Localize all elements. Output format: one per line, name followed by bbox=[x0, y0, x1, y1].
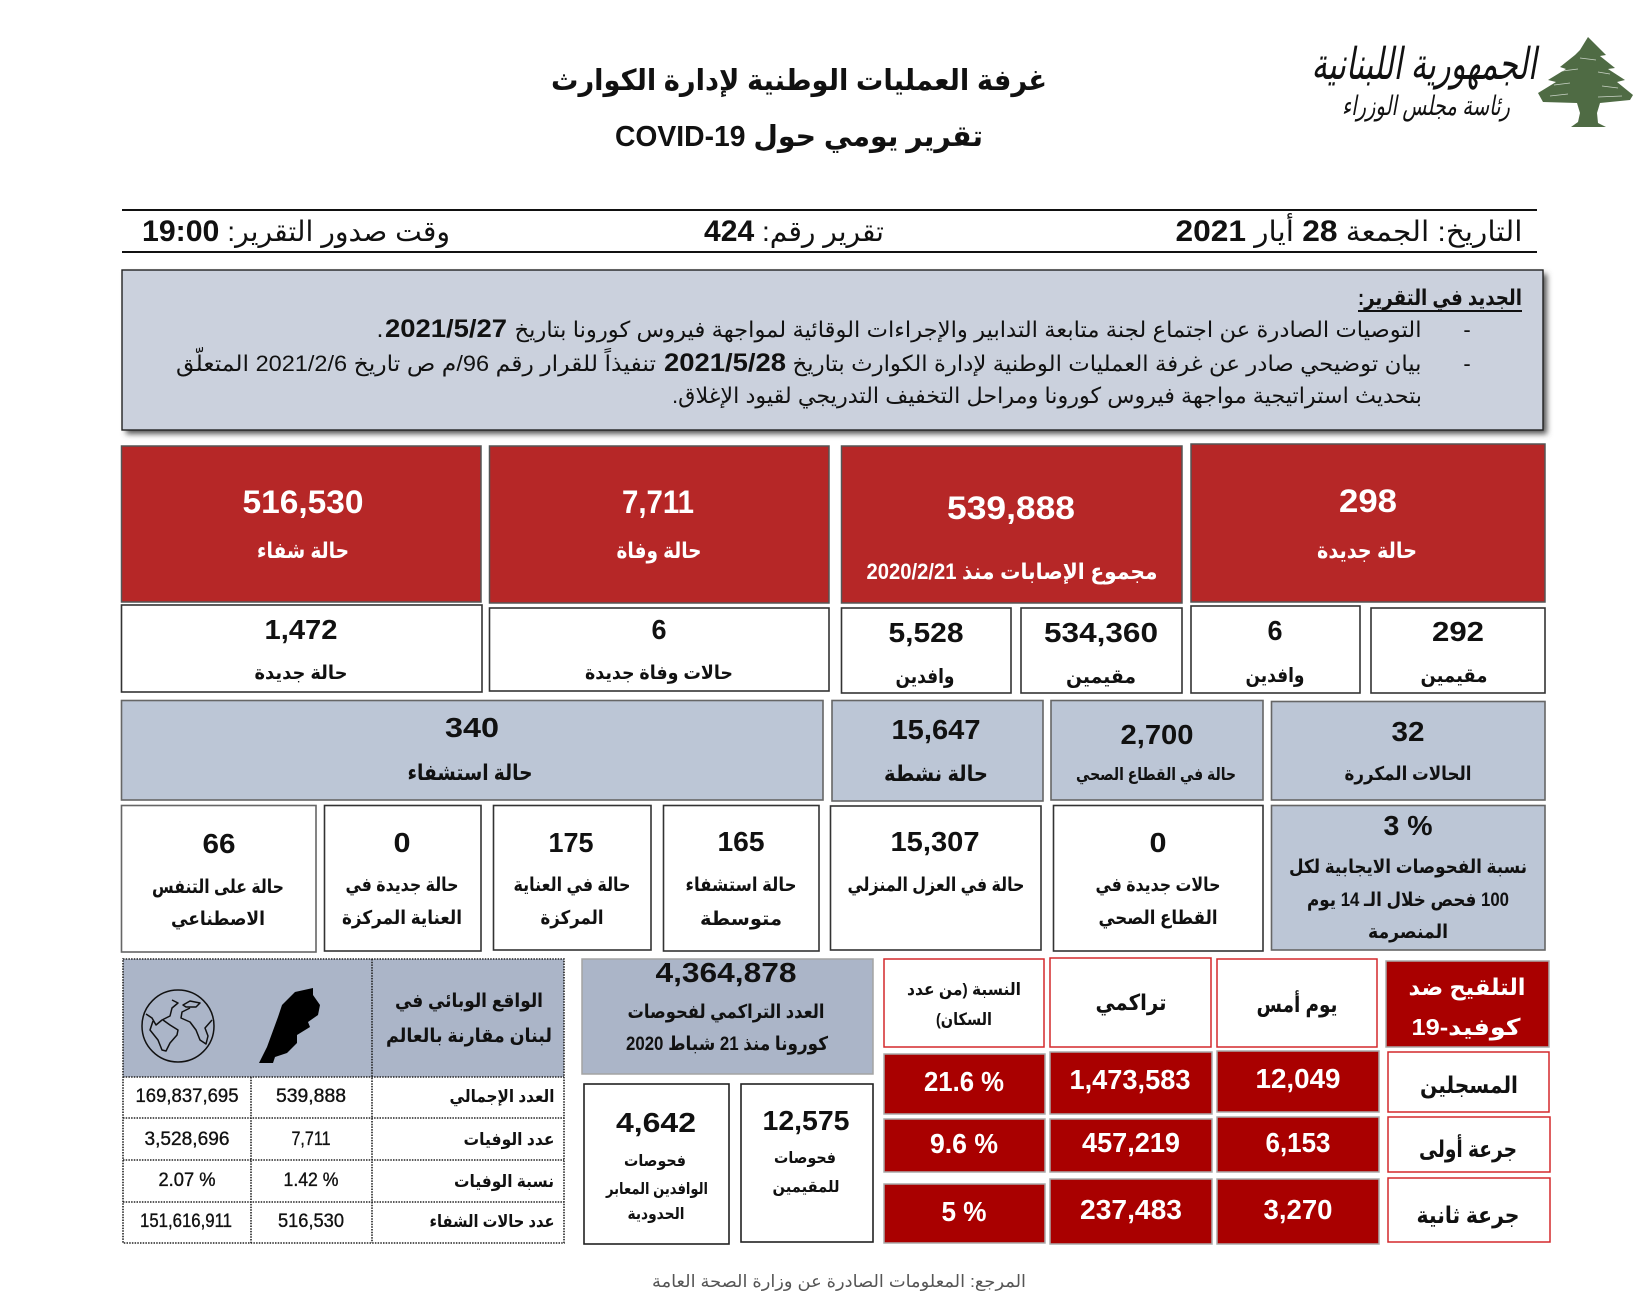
label: العدد التراكمي لفحوصات bbox=[628, 1002, 824, 1023]
header: percentage: النسبة (من عدد bbox=[907, 980, 1021, 1000]
row: death rate: 1.42 % bbox=[284, 1170, 339, 1191]
panel: new health sector bbox=[1054, 806, 1263, 951]
row label: registered bbox=[1388, 1052, 1549, 1112]
panel: new deaths bbox=[490, 608, 829, 691]
cell: first dose cumulative: 457,219 bbox=[1082, 1127, 1180, 1158]
label: حالة نشطة bbox=[884, 761, 988, 786]
label: فحوصات bbox=[624, 1153, 686, 1170]
bullet 2 text end: تنفيذاً للقرار رقم 96/م ص تاريخ 2021/2/6 المتعلّق bbox=[176, 347, 656, 377]
report number: تقرير رقم: 424 bbox=[704, 215, 884, 248]
header: vaccination: التلقيح ضد bbox=[1408, 974, 1526, 1001]
cell: second dose yesterday: 3,270 bbox=[1264, 1194, 1332, 1225]
label: مقيمين bbox=[1066, 666, 1136, 688]
bullet 1 date: 2021/5/27 bbox=[385, 315, 507, 343]
cell: second dose percentage: 5 % bbox=[942, 1196, 987, 1227]
label: الحالات المكررة bbox=[1344, 764, 1472, 785]
row: deaths: عدد الوفيات bbox=[464, 1130, 554, 1150]
header: yesterday bbox=[1217, 959, 1377, 1047]
bullet 2 date: 2021/5/28 bbox=[664, 349, 786, 377]
footer source: المرجع: المعلومات الصادرة عن وزارة الصحة العامة bbox=[652, 1272, 1026, 1292]
value: 340 bbox=[445, 712, 499, 743]
bullet 1 dash: - bbox=[1463, 317, 1471, 342]
label line 2: متوسطة bbox=[700, 909, 782, 930]
panel: health sector cases bbox=[1051, 700, 1263, 800]
value: 32 bbox=[1392, 716, 1424, 747]
panel: total cases bbox=[842, 446, 1182, 603]
cell: first dose percentage: 9.6 % bbox=[930, 1128, 998, 1159]
panel: hospitalised bbox=[122, 700, 823, 800]
label: حالة استشفاء bbox=[408, 760, 532, 785]
report time: وقت صدور التقرير: 19:00 bbox=[142, 215, 450, 248]
header: percentage bbox=[884, 959, 1044, 1047]
icon: globe bbox=[142, 990, 214, 1062]
vaccination table bbox=[884, 958, 1550, 1244]
subtitle: تقرير يومي حول COVID-19 bbox=[615, 121, 983, 153]
cell: registered yesterday bbox=[1217, 1051, 1379, 1112]
cell: second dose yesterday bbox=[1217, 1179, 1379, 1244]
cell: registered percentage: 21.6 % bbox=[924, 1066, 1004, 1097]
label: حالة جديدة bbox=[254, 663, 348, 684]
label line 2: كورونا منذ 21 شباط 2020 bbox=[626, 1034, 829, 1055]
cell: first dose yesterday: 6,153 bbox=[1266, 1127, 1330, 1158]
row label: second dose: جرعة ثانية bbox=[1416, 1202, 1520, 1229]
panel: active cases bbox=[832, 700, 1043, 801]
label: حالة جديدة في bbox=[346, 875, 458, 896]
value: 15,307 bbox=[890, 826, 980, 857]
label: نسبة الفحوصات الايجابية لكل bbox=[1289, 857, 1527, 878]
row: recoveries: عدد حالات الشفاء bbox=[430, 1212, 554, 1231]
header: cumulative: تراكمي bbox=[1096, 990, 1166, 1016]
row: deaths: 3,528,696 bbox=[144, 1129, 230, 1150]
label: حالة وفاة bbox=[616, 538, 702, 564]
panel: new cases bbox=[1191, 444, 1545, 602]
panel: new ICU bbox=[324, 806, 481, 951]
label line 2: المركزة bbox=[540, 908, 604, 929]
bullet 2 dash: - bbox=[1463, 351, 1471, 376]
bullet 2 text start: بيان توضيحي صادر عن غرفة العمليات الوطنية لإدارة الكوارث بتاريخ bbox=[792, 351, 1422, 377]
value: 66 bbox=[202, 828, 236, 859]
label: فحوصات bbox=[774, 1150, 836, 1167]
value: 175 bbox=[548, 827, 594, 858]
label line 2: العناية المركزة bbox=[342, 908, 462, 929]
value: 165 bbox=[718, 826, 764, 857]
value: 298 bbox=[1339, 483, 1397, 519]
header: percentage: السكان) bbox=[936, 1010, 992, 1029]
panel: new in the report bbox=[122, 270, 1547, 434]
row: total bbox=[136, 1086, 554, 1107]
cell: first dose yesterday bbox=[1217, 1117, 1379, 1172]
label: حالة في العزل المنزلي bbox=[848, 875, 1024, 896]
row label: second dose bbox=[1388, 1178, 1550, 1242]
value: 5,528 bbox=[888, 617, 964, 648]
panel: deaths bbox=[490, 446, 829, 603]
value: 6 bbox=[1268, 615, 1282, 646]
row: death rate: نسبة الوفيات bbox=[454, 1172, 554, 1192]
label: مجموع الإصابات منذ 2020/2/21 bbox=[866, 559, 1158, 585]
value: 15,647 bbox=[892, 714, 980, 745]
cell: registered percentage bbox=[884, 1054, 1045, 1114]
report date: التاريخ: الجمعة 28 أيار 2021 bbox=[1176, 212, 1522, 248]
label: وافدين bbox=[1246, 665, 1304, 687]
bullet 2 continuation: بتحديث استراتيجية مواجهة فيروس كورونا ومراحل التخفيف التدريجي لقيود الإغلاق. bbox=[672, 383, 1422, 409]
value: 0 bbox=[394, 827, 410, 858]
row: total: 539,888 bbox=[276, 1086, 346, 1107]
cell: registered cumulative: 1,473,583 bbox=[1070, 1064, 1190, 1095]
row: death rate bbox=[158, 1170, 554, 1192]
cell: registered cumulative bbox=[1050, 1052, 1212, 1114]
label: حالات جديدة في bbox=[1096, 875, 1220, 896]
header: cumulative bbox=[1050, 958, 1211, 1047]
cell: second dose cumulative bbox=[1050, 1179, 1212, 1244]
label: وافدين bbox=[896, 666, 954, 688]
panel: ICU bbox=[494, 806, 651, 950]
logo text: Presidency of the Council of Ministers: رئاسة مجلس الوزراء bbox=[1342, 91, 1510, 122]
cell: second dose percentage bbox=[884, 1184, 1045, 1243]
row: total: 169,837,695 bbox=[136, 1086, 238, 1107]
label: حالة على التنفس bbox=[152, 877, 284, 898]
value: 534,360 bbox=[1044, 617, 1158, 648]
icon: cedar tree logo bbox=[1538, 37, 1633, 127]
value: 12,575 bbox=[762, 1105, 850, 1136]
value: 516,530 bbox=[242, 484, 364, 520]
heading: new in report: الجديد في التقرير: bbox=[1358, 285, 1522, 311]
panel: total incoming bbox=[842, 608, 1011, 693]
panel: cumulative tests bbox=[582, 957, 873, 1074]
panel: home isolation bbox=[830, 806, 1041, 950]
row: total: العدد الإجمالي bbox=[450, 1087, 554, 1107]
cell: registered yesterday: 12,049 bbox=[1256, 1063, 1340, 1094]
header: yesterday: يوم أمس bbox=[1256, 989, 1338, 1018]
label line 2: للمقيمين bbox=[772, 1179, 840, 1196]
panel: new recoveries bbox=[122, 605, 482, 692]
row: death rate: 2.07 % bbox=[158, 1170, 216, 1191]
label line 3: المنصرمة bbox=[1368, 922, 1448, 943]
cell: first dose cumulative bbox=[1050, 1119, 1212, 1172]
header: vaccination: كوفيد-19 bbox=[1412, 1014, 1521, 1041]
value: 292 bbox=[1432, 616, 1484, 647]
panel: ventilated bbox=[122, 806, 316, 952]
table: Lebanon vs world bbox=[123, 959, 564, 1243]
panel: resident tests bbox=[741, 1084, 873, 1242]
row label: first dose bbox=[1388, 1117, 1550, 1172]
title: غرفة العمليات الوطنية لإدارة الكوارث bbox=[551, 65, 1047, 97]
value: 7,711 bbox=[622, 484, 694, 520]
value: 539,888 bbox=[947, 490, 1075, 526]
icon: Lebanon map bbox=[259, 988, 320, 1063]
table heading line 2: لبنان مقارنة بالعالم bbox=[386, 1026, 552, 1047]
logo text: Republic of Lebanon: الجمهورية اللبنانية bbox=[1312, 40, 1540, 90]
label: حالة استشفاء bbox=[686, 875, 796, 896]
header: vaccination bbox=[1386, 961, 1549, 1047]
label line 3: الحدودية bbox=[628, 1206, 684, 1223]
cell: second dose cumulative: 237,483 bbox=[1080, 1194, 1182, 1225]
row: deaths bbox=[144, 1129, 554, 1150]
panel: total residents bbox=[1021, 608, 1182, 693]
bullet 1 period: . bbox=[377, 315, 383, 343]
value: 4,642 bbox=[616, 1107, 696, 1138]
label line 2: القطاع الصحي bbox=[1098, 908, 1218, 929]
panel: incoming tests bbox=[584, 1084, 729, 1244]
cell: first dose percentage bbox=[884, 1119, 1045, 1172]
panel: moderate hospitalisation bbox=[664, 806, 819, 951]
row label: registered: المسجلين bbox=[1420, 1072, 1518, 1099]
row: recoveries bbox=[140, 1211, 554, 1232]
report info bar bbox=[122, 210, 1537, 252]
value: 6 bbox=[652, 614, 666, 645]
label: حالة في القطاع الصحي bbox=[1076, 765, 1236, 785]
label: حالة في العناية bbox=[514, 875, 630, 896]
panel: new residents bbox=[1371, 608, 1545, 693]
value: 4,364,878 bbox=[656, 957, 796, 988]
row: recoveries: 516,530 bbox=[278, 1211, 344, 1232]
row: recoveries: 151,616,911 bbox=[140, 1211, 232, 1232]
label: حالة شفاء bbox=[257, 538, 349, 563]
value: 0 bbox=[1150, 827, 1166, 858]
bullet 1 text: التوصيات الصادرة عن اجتماع لجنة متابعة التدابير والإجراءات الوقائية لمواجهة فيروس كورونا بتاريخ bbox=[514, 317, 1422, 343]
panel: new incoming bbox=[1191, 606, 1360, 693]
row label: first dose: جرعة أولى bbox=[1419, 1133, 1517, 1163]
panel: positivity bbox=[1272, 806, 1545, 950]
table heading: الواقع الوبائي في bbox=[395, 991, 543, 1012]
label: حالات وفاة جديدة bbox=[585, 663, 733, 684]
row: deaths: 7,711 bbox=[292, 1129, 330, 1150]
value: 2,700 bbox=[1120, 719, 1194, 750]
panel: repeated cases bbox=[1272, 702, 1545, 800]
label line 2: الوافدين المعابر bbox=[605, 1181, 708, 1198]
label line 2: الاصطناعي bbox=[171, 909, 265, 930]
value: 3 % bbox=[1384, 810, 1433, 841]
panel: recovered bbox=[122, 446, 481, 602]
label line 2: 100 فحص خلال الـ 14 يوم bbox=[1307, 890, 1509, 911]
label: حالة جديدة bbox=[1317, 538, 1417, 563]
value: 1,472 bbox=[264, 614, 338, 645]
label: مقيمين bbox=[1420, 665, 1488, 687]
